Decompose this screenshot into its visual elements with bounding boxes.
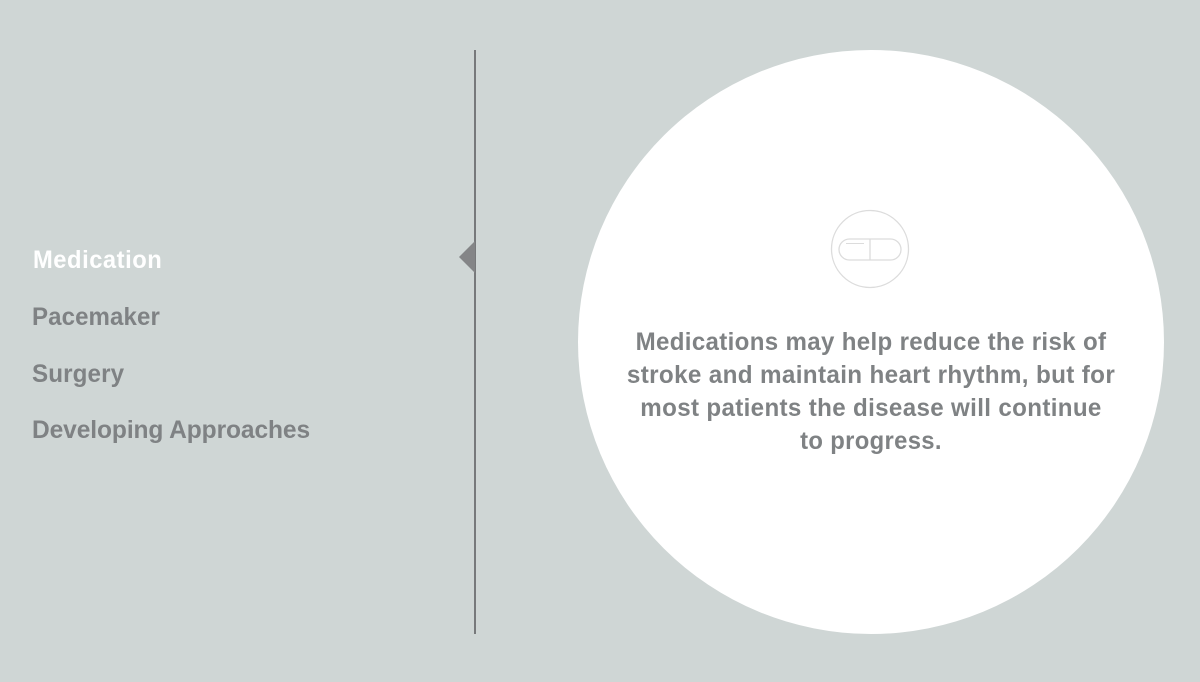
white content circle xyxy=(578,50,1164,634)
description text: Medications may help reduce the risk of xyxy=(636,328,1106,356)
menu item: Surgery: Surgery xyxy=(32,360,124,388)
description text: most patients the disease will continue xyxy=(640,394,1102,422)
vertical divider line xyxy=(474,50,476,634)
description text xyxy=(627,328,1115,455)
description text: stroke and maintain heart rhythm, but for xyxy=(627,361,1115,389)
menu item: Medication (active): Medication xyxy=(33,246,162,274)
description text: to progress. xyxy=(800,427,942,455)
menu item: Pacemaker: Pacemaker xyxy=(32,303,160,331)
active item pointer arrow xyxy=(459,242,475,272)
menu item: Developing Approaches: Developing Approaches xyxy=(32,416,310,444)
navigation menu xyxy=(32,246,310,444)
icon: medication capsule xyxy=(830,210,910,288)
